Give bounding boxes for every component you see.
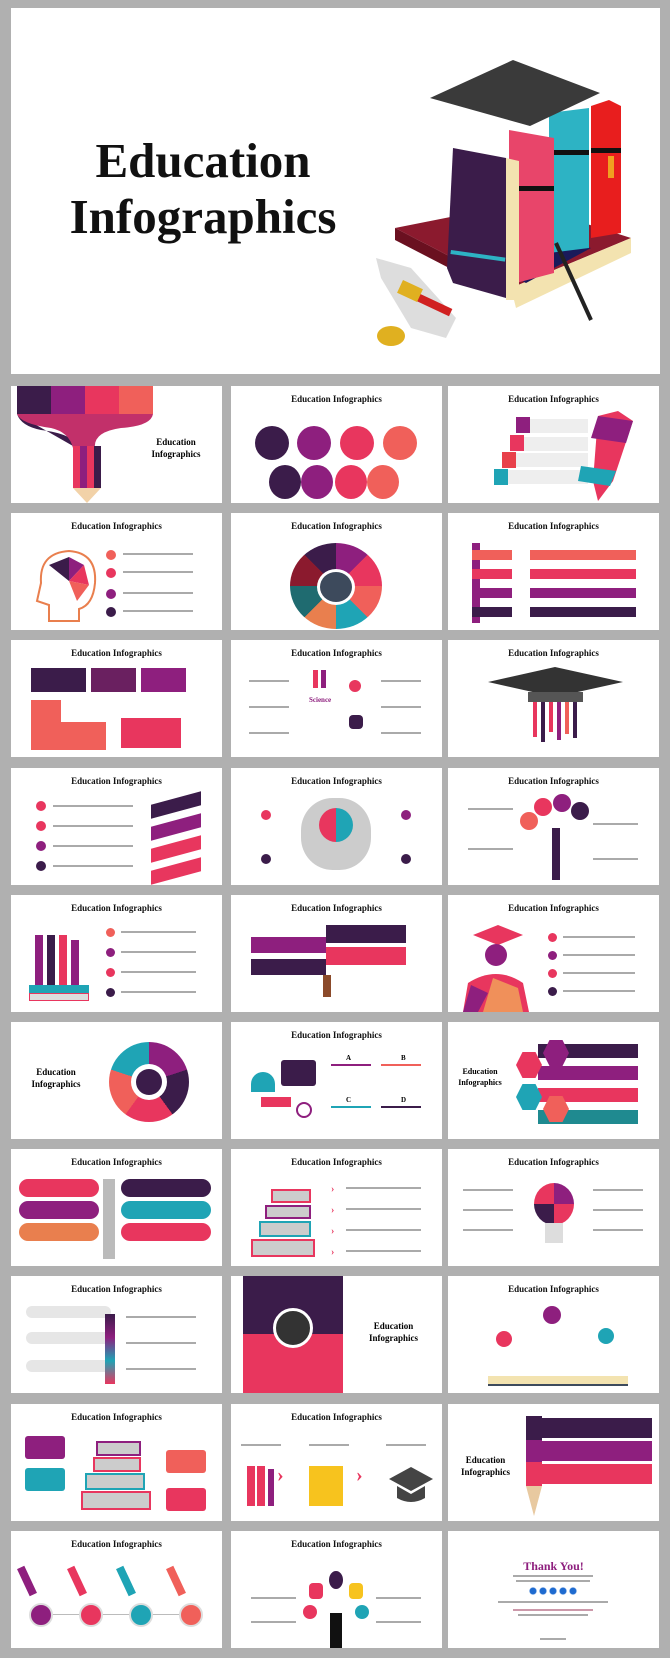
slide 15: graduate	[448, 895, 659, 1012]
hero title: Education	[95, 133, 311, 188]
slide 28: pencils timeline: Education Infographics	[71, 1539, 162, 1549]
slide 26: process books to cap: ›	[277, 1464, 284, 1486]
slide 8: science: Education Infographics	[291, 648, 382, 658]
slide 16: circle cycle with title	[11, 1022, 222, 1139]
slide 20: book stack arrows: ›	[331, 1205, 334, 1216]
slide 29: pencil tree	[231, 1531, 442, 1648]
slide 25: books with labels	[11, 1404, 222, 1521]
slide 3: pencil zigzag: Education Infographics	[508, 394, 599, 404]
slide 23: square with books: Education	[374, 1321, 413, 1331]
slide 26: process books to cap: Education Infographics	[291, 1412, 382, 1422]
slide 1: pencil funnel: Education	[156, 437, 196, 447]
slide 7: arrows cycle	[11, 640, 222, 757]
slide 2: circles	[231, 386, 442, 503]
slide 30: thank you: Thank You!	[523, 1559, 584, 1573]
slide 26: process books to cap: ›	[356, 1464, 363, 1486]
slide 20: book stack arrows: ›	[331, 1247, 334, 1258]
slide 30: thank you	[448, 1531, 659, 1648]
slide 1: pencil funnel	[11, 386, 222, 503]
slide 13: books bars	[11, 895, 222, 1012]
slide 15: graduate: Education Infographics	[508, 903, 599, 913]
slide 9: grad cap bars	[448, 640, 659, 757]
slide 24: open book: Education Infographics	[508, 1284, 599, 1294]
slide 1: pencil funnel: Infographics	[151, 449, 200, 459]
hero illustration: books and cap	[376, 60, 631, 346]
slide 4: head	[11, 513, 222, 630]
slide 22: pencil list: Education Infographics	[71, 1284, 162, 1294]
slide 16: circle cycle with title: Education	[36, 1067, 76, 1077]
hero panel	[11, 8, 660, 374]
slide 18: hexagons: Infographics	[458, 1078, 502, 1087]
slide 23: square with books: Infographics	[369, 1333, 418, 1343]
slide 18: hexagons	[448, 1022, 659, 1139]
slide 24: open book	[448, 1276, 659, 1393]
slide 6: pencil bars: Education Infographics	[508, 521, 599, 531]
slide 4: head: Education Infographics	[71, 521, 162, 531]
slide 17: school items: B	[401, 1054, 406, 1062]
slide 20: book stack arrows	[231, 1149, 442, 1266]
slide 3: pencil zigzag	[448, 386, 659, 503]
slide 18: hexagons: Education	[462, 1067, 498, 1076]
slide 12: petals pencil: Education Infographics	[508, 776, 599, 786]
slide 5: circle segments	[231, 513, 442, 630]
slide 26: process books to cap	[231, 1404, 442, 1521]
slide 8: science	[231, 640, 442, 757]
slide 6: pencil bars	[448, 513, 659, 630]
slide 2: circles: Education Infographics	[291, 394, 382, 404]
slide 21: light bulb	[448, 1149, 659, 1266]
slide 22: pencil list	[11, 1276, 222, 1393]
slide 9: grad cap bars: Education Infographics	[508, 648, 599, 658]
slide 14: steps banners	[231, 895, 442, 1012]
slide 16: circle cycle with title: Infographics	[31, 1079, 80, 1089]
slide 17: school items: A	[346, 1054, 351, 1062]
slide 12: petals pencil	[448, 768, 659, 885]
slide 27: pencil stripes: Infographics	[461, 1467, 510, 1477]
slide 21: light bulb: Education Infographics	[508, 1157, 599, 1167]
slide 10: ribbon	[11, 768, 222, 885]
hero title: Infographics	[70, 189, 336, 244]
slide 17: school items: D	[401, 1096, 406, 1104]
slide 19: pencil banners: Education Infographics	[71, 1157, 162, 1167]
hero title	[70, 133, 336, 244]
slide 19: pencil banners	[11, 1149, 222, 1266]
slide 10: ribbon: Education Infographics	[71, 776, 162, 786]
slide 29: pencil tree: Education Infographics	[291, 1539, 382, 1549]
slide 20: book stack arrows: ›	[331, 1226, 334, 1237]
slide 17: school items	[231, 1022, 442, 1139]
slide 25: books with labels: Education Infographics	[71, 1412, 162, 1422]
slide 17: school items: Education Infographics	[291, 1030, 382, 1040]
slide 20: book stack arrows: Education Infographics	[291, 1157, 382, 1167]
slide 23: square with books	[231, 1276, 442, 1393]
slide 5: circle segments: Education Infographics	[291, 521, 382, 531]
slide 14: steps banners: Education Infographics	[291, 903, 382, 913]
slide 11: brain heads	[231, 768, 442, 885]
slide 27: pencil stripes: Education	[466, 1455, 505, 1465]
slide 17: school items: C	[346, 1096, 351, 1104]
slide 13: books bars: Education Infographics	[71, 903, 162, 913]
slide 7: arrows cycle: Education Infographics	[71, 648, 162, 658]
slide 28: pencils timeline	[11, 1531, 222, 1648]
slide 8: science: Science	[309, 696, 331, 704]
slide 27: pencil stripes	[448, 1404, 659, 1521]
slide 11: brain heads: Education Infographics	[291, 776, 382, 786]
slide 20: book stack arrows: ›	[331, 1184, 334, 1195]
